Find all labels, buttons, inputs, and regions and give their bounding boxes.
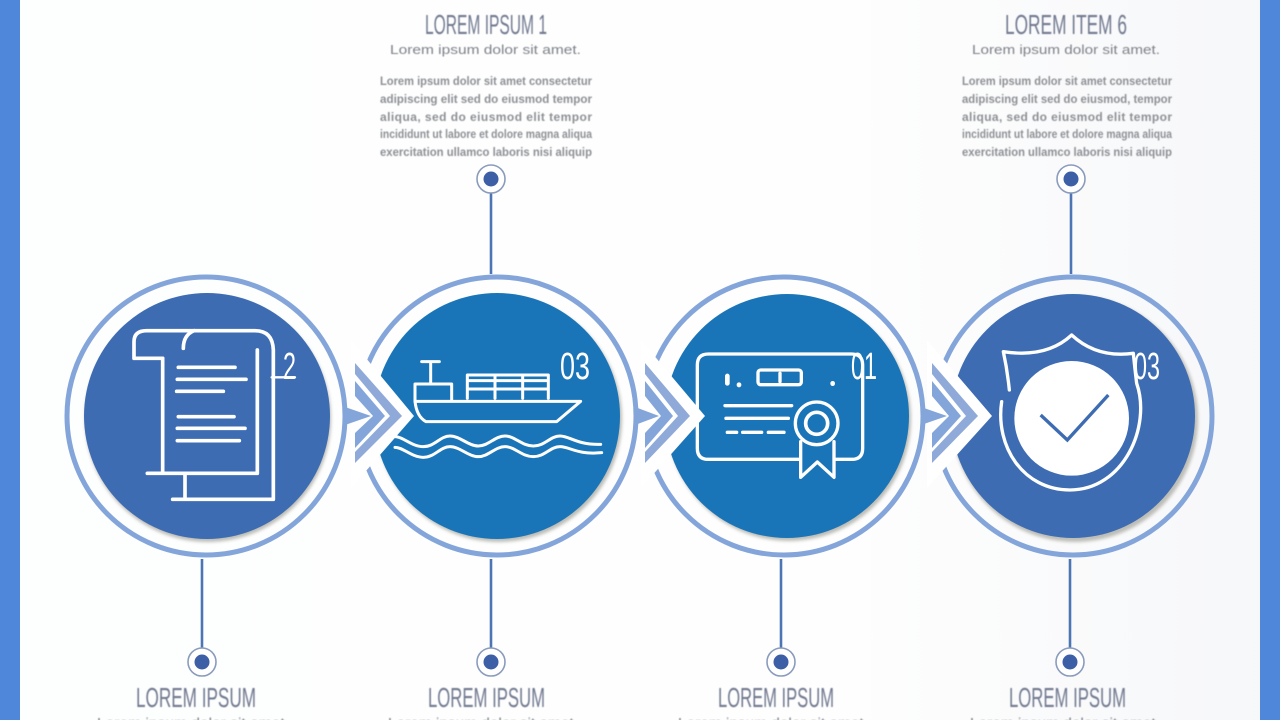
step 1: document circle xyxy=(67,277,345,555)
bottom text: step 4 xyxy=(970,682,1160,720)
step number: 03 xyxy=(560,346,590,388)
top connector: step 2 xyxy=(477,165,505,274)
body copy: adipiscing elit sed do eiusmod, tempor xyxy=(962,92,1172,106)
step number: 03 xyxy=(1134,346,1160,388)
step number: 01 xyxy=(851,346,877,388)
step number: 2 xyxy=(283,346,296,388)
step 3: certificate circle xyxy=(645,277,923,555)
bottom text: step 2: LOREM IPSUM xyxy=(428,682,545,713)
arrow: step 2 to step 3 xyxy=(635,340,705,488)
top text block: step 4 xyxy=(962,9,1172,159)
body copy: exercitation ullamco laboris nisi aliquip xyxy=(962,145,1172,159)
right side bar xyxy=(1260,0,1280,720)
bottom text: step 1 xyxy=(97,682,289,720)
body copy xyxy=(380,74,592,159)
bottom text: step 3: LOREM IPSUM xyxy=(718,682,834,713)
heading: LOREM ITEM 6 xyxy=(1005,9,1127,40)
bottom connector: step 2 xyxy=(477,559,505,676)
bottom text: step 3 xyxy=(678,682,868,720)
bottom text: step 2 xyxy=(388,682,578,720)
body copy: incididunt ut labore et dolore magna aliqua xyxy=(962,127,1172,141)
left side bar xyxy=(0,0,20,720)
icon: scroll document xyxy=(134,331,295,499)
subheading: Lorem ipsum dolor sit amet. xyxy=(390,43,581,57)
subheading: Lorem ipsum dolor sit amet. xyxy=(972,43,1160,57)
body copy: exercitation ullamco laboris nisi aliquip xyxy=(380,145,592,159)
top text block: step 2 xyxy=(380,9,592,159)
bottom text: step 4: LOREM IPSUM xyxy=(1009,682,1126,713)
arrow: step 1 to step 2 xyxy=(345,340,414,488)
bottom text: step 1: LOREM IPSUM xyxy=(136,682,256,713)
icon: cargo ship xyxy=(395,362,602,457)
body copy: Lorem ipsum dolor sit amet consectetur xyxy=(962,74,1172,88)
step 4: shield circle xyxy=(934,277,1212,555)
top connector: step 4 xyxy=(1057,165,1085,274)
step 2: ship circle xyxy=(358,277,636,555)
body copy: Lorem ipsum dolor sit amet consectetur xyxy=(380,74,592,88)
bottom connector: step 3 xyxy=(767,559,795,676)
arrow: step 3 to step 4 xyxy=(921,340,992,488)
bottom connector: step 4 xyxy=(1056,559,1084,676)
body copy: adipiscing elit sed do eiusmod tempor xyxy=(380,92,592,106)
body copy xyxy=(962,74,1172,159)
icon: certificate with ribbon xyxy=(697,354,863,477)
body copy: incididunt ut labore et dolore magna aliqua xyxy=(380,127,592,141)
body copy: aliqua, sed do eiusmod elit tempor xyxy=(380,110,592,124)
bottom connector: step 1 xyxy=(188,559,216,676)
heading: LOREM IPSUM 1 xyxy=(425,9,547,40)
body copy: aliqua, sed do eiusmod elit tempor xyxy=(962,110,1172,124)
icon: shield with check mark xyxy=(1001,335,1141,490)
